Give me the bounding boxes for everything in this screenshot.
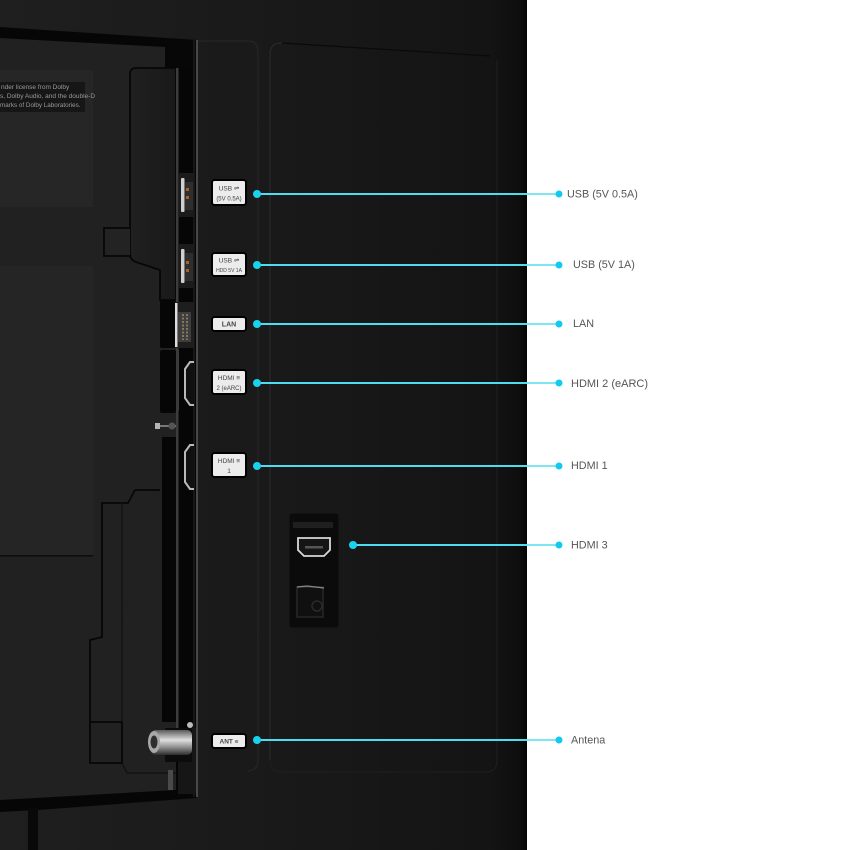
label: ANT	[212, 734, 246, 748]
port column channel	[160, 40, 198, 797]
port: LAN	[175, 302, 194, 348]
certification label text	[0, 82, 95, 112]
port name: HDMI 3: HDMI 3	[571, 540, 608, 552]
port name: HDMI 2 (eARC): HDMI 2 (eARC)	[571, 378, 648, 390]
recessed back panel	[0, 27, 197, 812]
icon: HDMI 3 socket	[298, 538, 330, 556]
label: ANT: ANT ≡	[220, 738, 239, 746]
TV rear body	[0, 0, 527, 850]
label: USB 1A	[212, 253, 246, 276]
label: USB 0.5A	[212, 180, 246, 205]
cable cover outline	[90, 68, 176, 773]
port: antenna connector	[148, 722, 193, 790]
label: USB 0.5A: (5V 0.5A)	[216, 196, 242, 202]
port name: USB (5V 0.5A): USB (5V 0.5A)	[567, 188, 638, 200]
certification label text: s, Dolby Audio, and the double-D	[0, 93, 95, 100]
port name: HDMI 1: HDMI 1	[571, 460, 608, 472]
label: HDMI 1: HDMI ≡	[218, 458, 240, 465]
callout line: USB 5V 1A	[253, 261, 562, 269]
label: LAN	[212, 317, 246, 331]
side panel outlines	[198, 41, 497, 772]
label: HDMI 2: HDMI ≡	[218, 375, 240, 382]
label: HDMI 2	[212, 370, 246, 394]
lower stand gap	[28, 808, 38, 850]
label: USB 1A: HDD 5V 1A	[216, 268, 243, 274]
callout line: LAN	[253, 320, 562, 328]
port name: USB (5V 1A): USB (5V 1A)	[573, 259, 635, 271]
certification label text: nder license from Dolby	[1, 84, 70, 91]
callout line: USB 5V 0.5A	[253, 190, 562, 198]
icon: optical socket	[297, 587, 323, 617]
port: HDMI 2	[176, 350, 194, 410]
port: USB 0.5A	[179, 173, 194, 217]
port: USB 1A	[179, 244, 194, 288]
label: USB 1A: USB ⇌	[219, 258, 240, 264]
mounting screw	[155, 422, 176, 430]
label: HDMI 1	[212, 453, 246, 477]
port: HDMI 1	[185, 445, 194, 489]
callout line: HDMI 2	[253, 379, 562, 387]
inset label panels	[0, 70, 93, 556]
side port module: HDMI 3 and optical	[289, 513, 339, 628]
port name: Antena: Antena	[571, 734, 605, 746]
label: USB 0.5A: USB ⇌	[219, 186, 240, 192]
label: LAN: LAN	[222, 322, 236, 328]
label: HDMI 2: 2 (eARC)	[216, 386, 242, 392]
callout line: HDMI 1	[253, 462, 562, 470]
port name: LAN: LAN	[573, 318, 594, 330]
certification label text: marks of Dolby Laboratories.	[0, 102, 81, 109]
callout line: HDMI 3	[349, 541, 562, 549]
label: HDMI 1: 1	[227, 468, 231, 475]
callout line: Antenna	[253, 736, 562, 744]
